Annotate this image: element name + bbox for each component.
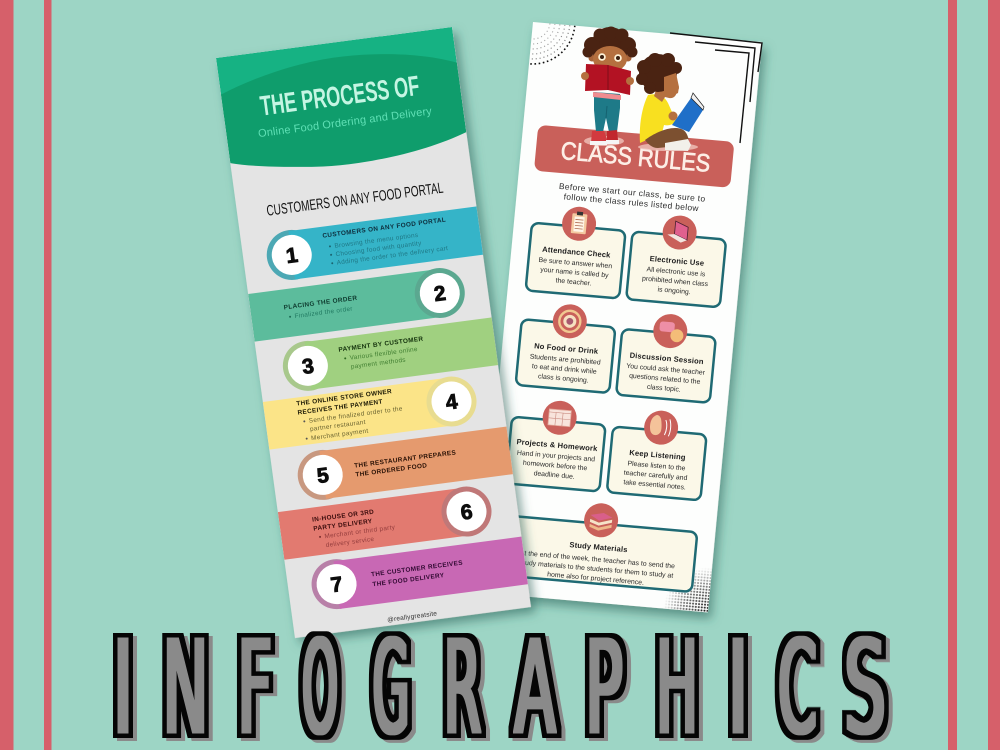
card: study materials: study materials to the students for them to study at bbox=[519, 559, 674, 580]
band 7: customer receives: 7 bbox=[329, 573, 344, 597]
card: keep listening bbox=[607, 407, 709, 500]
main title bbox=[113, 612, 886, 750]
card: no food or drink bbox=[516, 300, 617, 393]
card: projects and homework bbox=[506, 397, 608, 492]
panel: class rules poster bbox=[499, 22, 771, 624]
card: keep listening: Please listen to the bbox=[627, 460, 686, 472]
band 3: payment by customer: payment methods bbox=[350, 357, 406, 371]
band 2: placing the order: Finalized the order bbox=[294, 305, 354, 320]
card: discussion session: Discussion Session bbox=[629, 351, 704, 366]
card: no food or drink: class is ongoing. bbox=[538, 373, 589, 385]
band 2: placing the order: PLACING THE ORDER bbox=[283, 295, 358, 311]
handle: @reallygreatsite bbox=[387, 610, 438, 624]
band 3: payment by customer bbox=[280, 316, 500, 394]
band 3: payment by customer: PAYMENT BY CUSTOMER bbox=[338, 336, 424, 354]
card: discussion session: You could ask the teacher bbox=[626, 363, 706, 377]
halftone corner bbox=[665, 568, 712, 612]
card: projects and homework: Projects & Homework bbox=[516, 437, 599, 453]
band 1: customers on any food portal: Choosing food with quantity bbox=[335, 240, 422, 258]
title banner: CLASS RULES bbox=[560, 137, 712, 178]
band 6: delivery: 6 bbox=[459, 500, 474, 525]
band 1: customers on any food portal: CUSTOMERS ON ANY FOOD PORTAL bbox=[322, 217, 447, 240]
illustration: boy with red book bbox=[581, 26, 638, 146]
icon: plate bbox=[551, 303, 588, 340]
icon: books bbox=[583, 502, 620, 539]
band 2: placing the order: 2 bbox=[433, 282, 447, 306]
band 2: placing the order bbox=[248, 265, 468, 343]
curly hair bbox=[582, 26, 638, 65]
band 5: restaurant prepares: THE RESTAURANT PREPARES bbox=[354, 449, 457, 470]
card: attendance check bbox=[526, 203, 627, 299]
card: attendance check: Be sure to answer when bbox=[538, 257, 613, 270]
curly hair bbox=[636, 53, 682, 94]
card: keep listening: Keep Listening bbox=[629, 448, 686, 462]
title banner bbox=[534, 125, 734, 188]
card: no food or drink: Students are prohibited bbox=[529, 353, 601, 367]
card: projects and homework: deadline due. bbox=[533, 470, 575, 481]
card: study materials: Study Materials bbox=[569, 540, 628, 554]
band 1: customers on any food portal bbox=[264, 205, 484, 283]
card: projects and homework: homework before the bbox=[523, 460, 588, 472]
card: no food or drink: No Food or Drink bbox=[534, 341, 599, 356]
band 5: restaurant prepares bbox=[295, 425, 515, 503]
intro text bbox=[558, 181, 706, 214]
dotted arc decoration bbox=[530, 24, 576, 65]
card: discussion session bbox=[616, 310, 718, 403]
card: study materials bbox=[497, 495, 699, 592]
illustration: boy with blue book bbox=[636, 53, 704, 151]
card: attendance check: Attendance Check bbox=[542, 245, 612, 260]
intro text: follow the class rules listed below bbox=[563, 191, 700, 213]
band 6: delivery bbox=[278, 483, 495, 561]
card: electronic use bbox=[626, 212, 728, 307]
band 4: online store owner bbox=[263, 373, 480, 451]
band 7: customer receives: THE FOOD DELIVERY bbox=[372, 572, 445, 588]
icon: ear bbox=[643, 409, 680, 446]
card: discussion session: class topic. bbox=[647, 384, 681, 394]
band 5: restaurant prepares: THE ORDERED FOOD bbox=[355, 462, 428, 479]
icon: calendar bbox=[541, 399, 578, 436]
band 4: online store owner: RECEIVES THE PAYMENT bbox=[297, 398, 383, 417]
icon: laptop bbox=[661, 214, 698, 251]
poster title: THE PROCESS OF bbox=[258, 70, 421, 122]
card: attendance check: your name is called by bbox=[540, 267, 609, 280]
band 4: online store owner: THE ONLINE STORE OWNER bbox=[296, 388, 392, 408]
poster subtitle: Online Food Ordering and Delivery bbox=[257, 105, 433, 140]
card: no food or drink: to eat and drink while bbox=[532, 363, 597, 376]
band 7: customer receives: THE CUSTOMER RECEIVES bbox=[371, 559, 464, 578]
card: electronic use: prohibited when class bbox=[642, 275, 709, 288]
band 7: customer receives bbox=[308, 535, 528, 612]
band 6: delivery: PARTY DELIVERY bbox=[313, 518, 373, 533]
band 6: delivery: IN-HOUSE OR 3RD bbox=[312, 509, 375, 524]
band 4: online store owner: 4 bbox=[444, 390, 459, 415]
card: electronic use: is ongoing. bbox=[657, 286, 691, 296]
band 1: customers on any food portal: Browsing the menu options bbox=[334, 232, 419, 250]
intro text: Before we start our class, be sure to bbox=[559, 181, 706, 204]
band 4: online store owner: Send the finalized order to the bbox=[308, 405, 403, 425]
card: attendance check: the teacher. bbox=[555, 277, 592, 288]
icon: clipboard bbox=[561, 205, 598, 242]
band 3: payment by customer: Various flexible online bbox=[349, 346, 418, 362]
band 6: delivery: delivery service bbox=[325, 536, 375, 549]
card: electronic use: All electronic use is bbox=[646, 266, 706, 278]
card: projects and homework: Hand in your projects and bbox=[517, 450, 595, 464]
corner lines bbox=[670, 33, 762, 143]
band 3: payment by customer: 3 bbox=[301, 355, 315, 379]
header wave bbox=[216, 27, 469, 180]
band 1: customers on any food portal: Adding the order to the delivery cart bbox=[336, 245, 449, 267]
panel: food ordering poster bbox=[216, 27, 532, 638]
band 5: restaurant prepares: 5 bbox=[316, 464, 331, 488]
card: study materials: home also for project reference. bbox=[547, 571, 644, 587]
band 6: delivery: Merchant or third party bbox=[324, 524, 396, 540]
card: study materials: At the end of the week, the teacher has to send the bbox=[520, 550, 675, 570]
card: keep listening: teacher carefully and bbox=[623, 470, 688, 482]
band 4: online store owner: Merchant payment bbox=[311, 428, 369, 442]
card: discussion session: questions related to the bbox=[629, 373, 701, 386]
section heading: CUSTOMERS ON ANY FOOD PORTAL bbox=[266, 180, 444, 220]
card: keep listening: take essential notes. bbox=[623, 479, 686, 492]
card: electronic use: Electronic Use bbox=[649, 254, 705, 268]
band 4: online store owner: partner restaurant bbox=[310, 419, 366, 433]
icon: chat bubbles bbox=[652, 313, 689, 350]
band 1: customers on any food portal: 1 bbox=[285, 244, 300, 268]
